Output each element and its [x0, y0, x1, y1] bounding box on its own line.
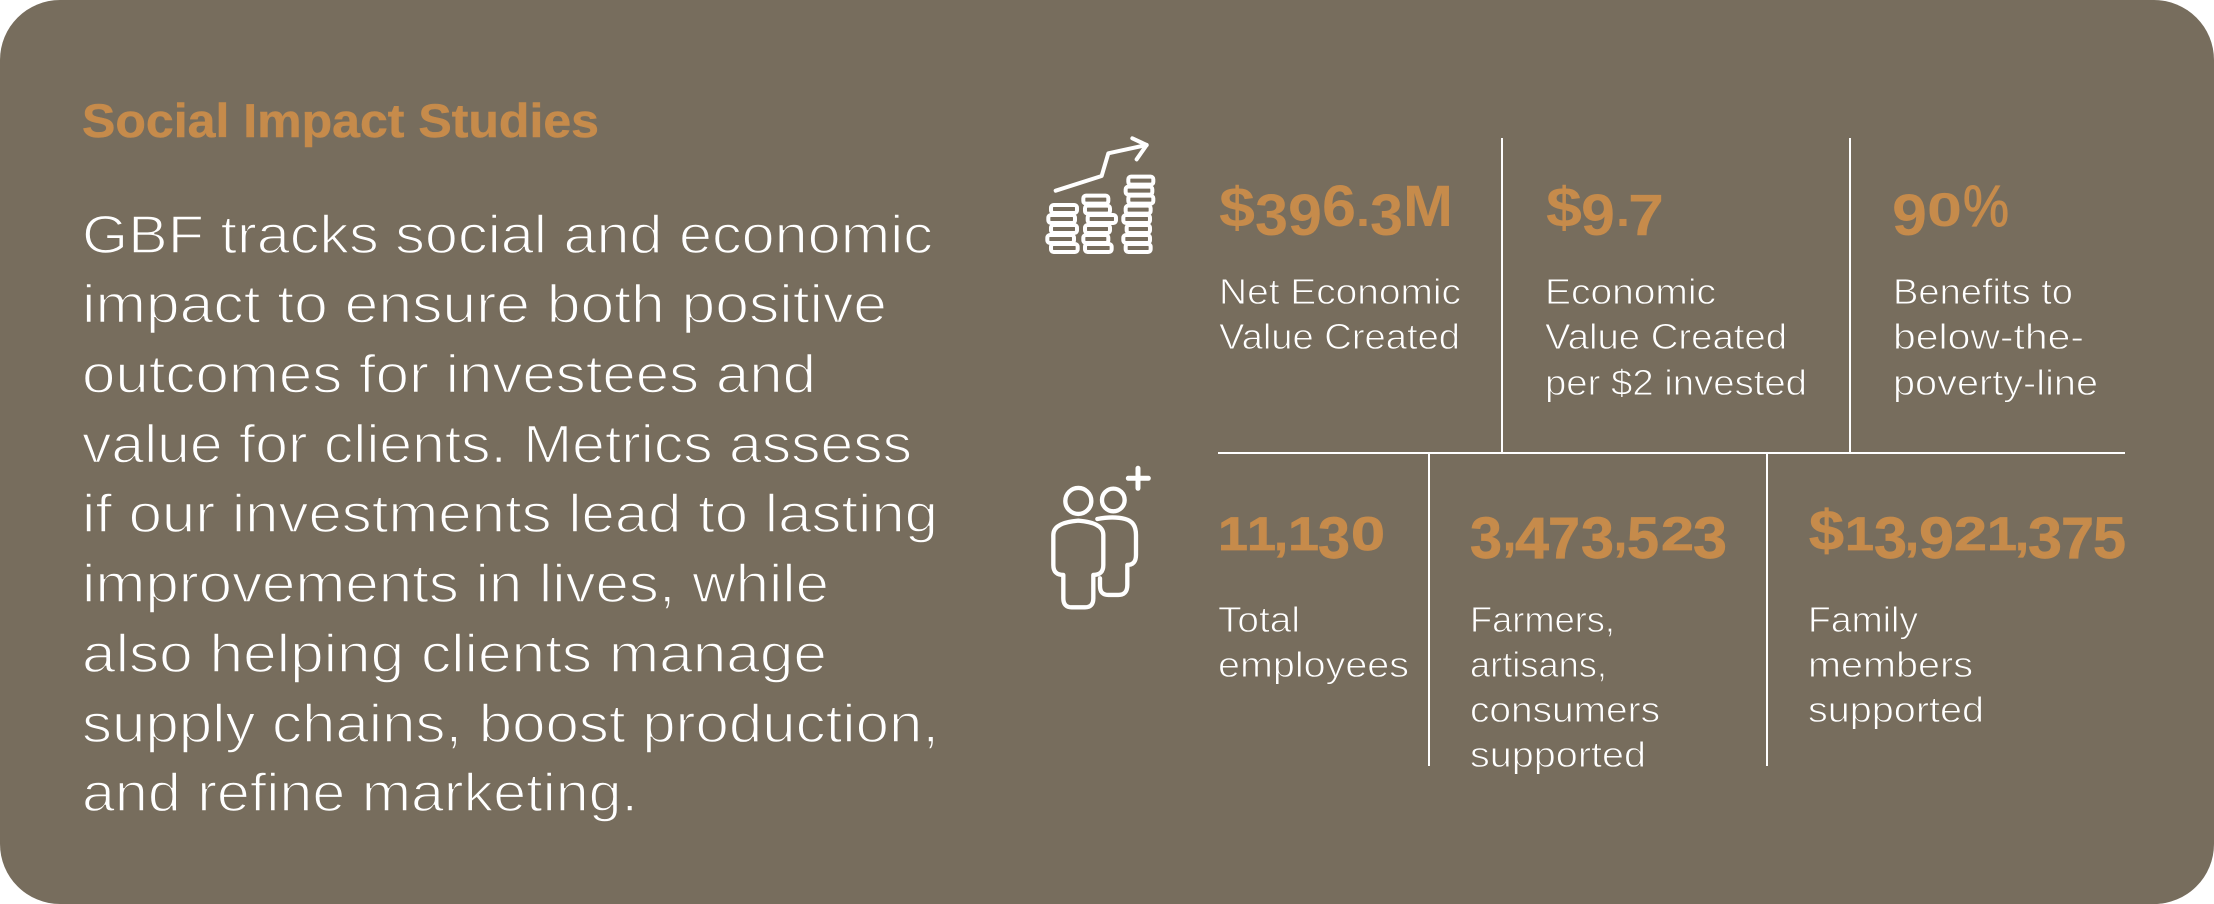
stat: total employees — [1218, 506, 1409, 685]
stat: family members supported — [1808, 499, 2126, 730]
stat: family members supported: 1 — [1987, 507, 2017, 560]
stat: farmers, artisans, consumers: 4 — [1515, 506, 1549, 571]
stat: family members supported: supported — [1808, 689, 1984, 730]
stat: farmers, artisans, consumers: 7 — [1548, 506, 1580, 571]
text block: description: GBF tracks social and economic — [82, 205, 933, 265]
stat: net economic value: 3 — [1255, 183, 1288, 248]
stat: total employees: 0 — [1351, 507, 1385, 560]
text block: description: value for clients. Metrics assess — [82, 414, 912, 474]
stat: net economic value: 9 — [1288, 183, 1322, 248]
stat: below poverty line — [1892, 174, 2098, 403]
stat: value per $2 invested — [1545, 176, 1807, 403]
stat: farmers, artisans, consumers: 3 — [1693, 506, 1727, 571]
stat: farmers, artisans, consumers: 2 — [1661, 507, 1694, 560]
stat: family members supported: $ — [1809, 499, 1844, 563]
stat: below poverty line: 0 — [1927, 183, 1962, 236]
stat: family members supported: members — [1808, 644, 1973, 685]
stat: farmers, artisans, consumers: Farmers, — [1470, 599, 1615, 640]
text block: description: improvements in lives, while — [82, 554, 829, 614]
stat: value per $2 invested: 9 — [1581, 183, 1615, 248]
stat: family members supported: 7 — [2061, 506, 2094, 571]
text block: description: if our investments lead to lasting — [82, 484, 938, 544]
stat: net economic value: . — [1356, 183, 1370, 236]
stat: net economic value: Value Created — [1219, 316, 1460, 357]
stat: farmers, artisans, consumers: artisans, — [1470, 644, 1607, 685]
stat: below poverty line: % — [1963, 174, 2009, 239]
stat: value per $2 invested: $ — [1546, 176, 1582, 240]
stat: family members supported: 3 — [1874, 506, 1907, 571]
stat: below poverty line: Benefits to — [1893, 271, 2073, 312]
stat: total employees: , — [1274, 507, 1288, 560]
stat: net economic value: 3 — [1370, 183, 1403, 248]
stat: total employees: Total — [1218, 599, 1300, 640]
text block: description: and refine marketing. — [82, 763, 638, 823]
stat: family members supported: , — [2015, 507, 2029, 560]
heading: Social Impact Studies — [82, 94, 599, 147]
stat: net economic value: Net Economic — [1219, 271, 1461, 312]
stat: below poverty line: poverty-line — [1893, 362, 2098, 403]
text block: description: impact to ensure both positive — [82, 274, 887, 334]
stat: family members supported: 1 — [1845, 507, 1874, 560]
stat: family members supported: 5 — [2093, 506, 2126, 571]
stat: value per $2 invested: per $2 invested — [1545, 362, 1807, 403]
text block: description — [82, 205, 939, 823]
stat: net economic value: M — [1403, 174, 1453, 239]
stat: total employees: 1 — [1247, 507, 1276, 560]
stat: value per $2 invested: . — [1616, 183, 1630, 236]
stat: total employees: 1 — [1288, 507, 1319, 560]
stat: family members supported: 2 — [1954, 507, 1987, 560]
stat: total employees: 1 — [1218, 507, 1248, 560]
stat: net economic value — [1219, 174, 1461, 357]
stat: farmers, artisans, consumers: supported — [1470, 734, 1646, 775]
stat: below poverty line: 9 — [1892, 183, 1927, 248]
stat: farmers, artisans, consumers: consumers — [1470, 689, 1660, 730]
stat: farmers, artisans, consumers — [1470, 506, 1727, 775]
stat: total employees: employees — [1218, 644, 1409, 685]
stat: value per $2 invested: 7 — [1628, 183, 1664, 248]
stat: family members supported: 9 — [1919, 506, 1954, 571]
stat: net economic value: 6 — [1322, 174, 1356, 239]
stat: family members supported: Family — [1808, 599, 1919, 640]
text block: description: also helping clients manage — [82, 624, 827, 684]
divider lines — [1218, 138, 2125, 766]
stat: farmers, artisans, consumers: 5 — [1627, 506, 1659, 571]
stat: farmers, artisans, consumers: , — [1503, 507, 1516, 560]
stat: net economic value: $ — [1219, 176, 1255, 240]
stat: family members supported: 3 — [2028, 506, 2062, 571]
icon: coins with rising arrow — [1047, 138, 1153, 252]
stat: farmers, artisans, consumers: 3 — [1581, 506, 1614, 571]
icon: people with plus — [1053, 468, 1148, 607]
text block: description: supply chains, boost production, — [82, 694, 939, 754]
stat: value per $2 invested: Value Created — [1545, 316, 1787, 357]
stat: value per $2 invested: Economic — [1545, 271, 1716, 312]
stat: below poverty line: below-the- — [1893, 316, 2084, 357]
stat: farmers, artisans, consumers: 3 — [1470, 506, 1502, 571]
text block: description: outcomes for investees and — [82, 344, 816, 404]
stat: family members supported: , — [1905, 507, 1919, 560]
stat: total employees: 3 — [1318, 506, 1350, 571]
stat: farmers, artisans, consumers: , — [1614, 507, 1627, 560]
